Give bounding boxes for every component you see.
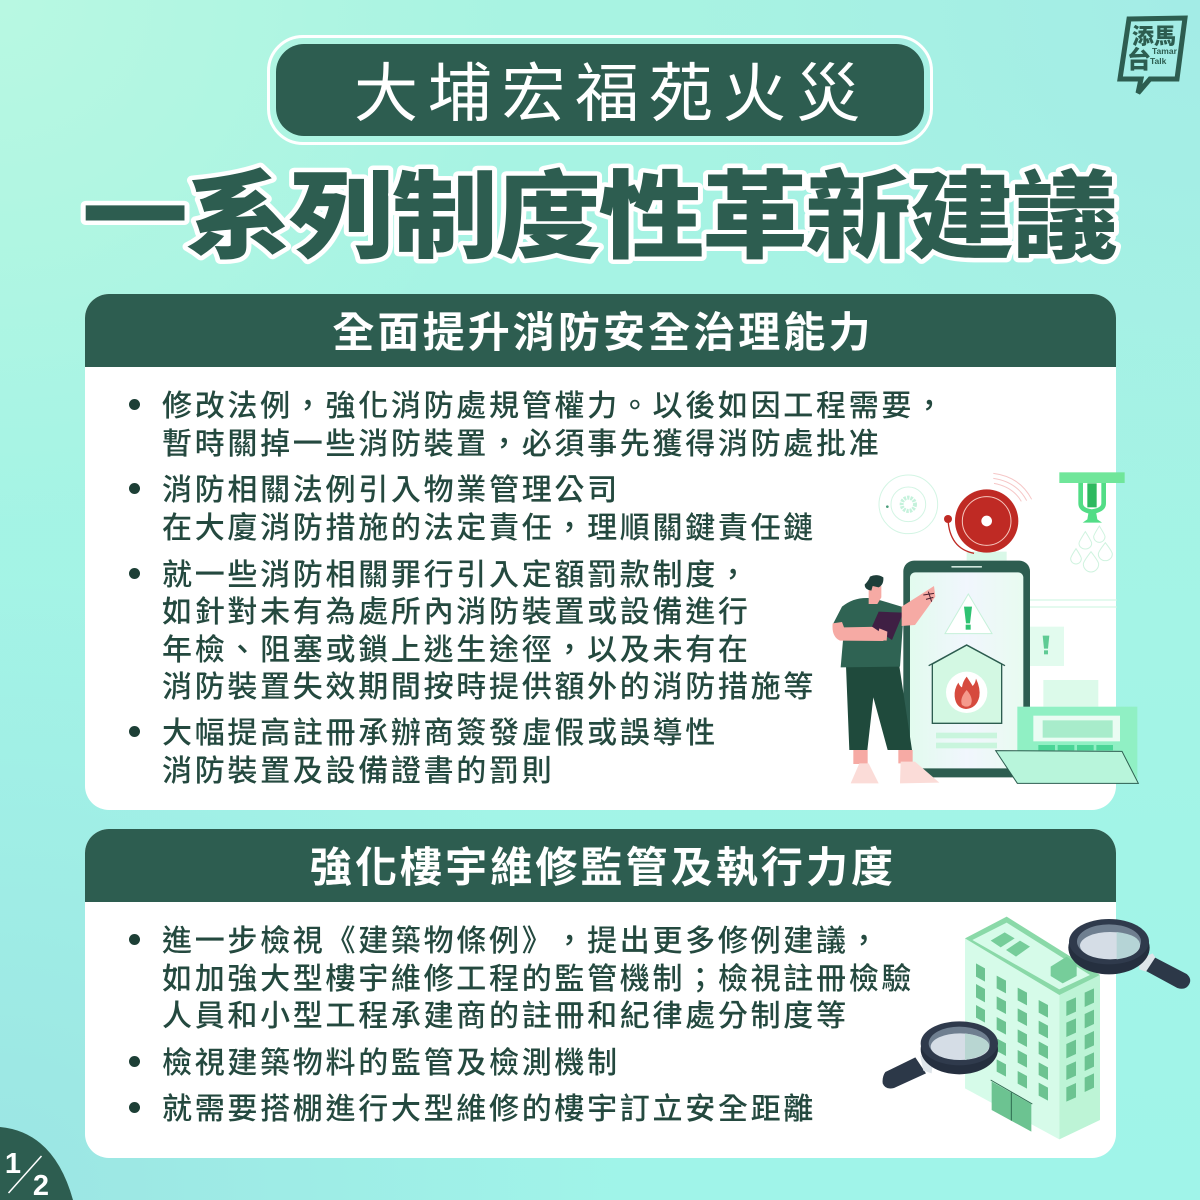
text block: building maintenance recommendations: 如加強大型樓宇維修工程的監管機制；檢視註冊檢驗 (162, 963, 914, 996)
text block: fire safety recommendations: 修改法例，強化消防處規管權力。以後如因工程需要， (162, 390, 947, 423)
icon: wall panel with warning (1030, 600, 1117, 707)
icon: smoke detector (879, 475, 938, 534)
text block: fire safety recommendations: 暫時關掉一些消防裝置，必須事先獲得消防處批准 (162, 428, 881, 461)
heading: fire safety governance (85, 294, 1116, 367)
icon: sprinkler and water drops (1059, 472, 1125, 572)
text block: fire safety recommendations: 消防相關法例引入物業管理公司 (162, 474, 620, 507)
heading: building maintenance: 強化樓宇維修監管及執行力度 (310, 844, 896, 891)
icon: upper magnifying glass (1068, 919, 1190, 989)
text block: fire safety recommendations: 在大廈消防措施的法定責任，理順關鍵責任鏈 (162, 512, 816, 545)
text block: fire safety recommendations: 消防裝置失效期間按時提供額外的消防措施等 (162, 671, 816, 704)
heading: fire safety governance: 全面提升消防安全治理能力 (332, 309, 874, 356)
text block: building maintenance recommendations: 就需要搭棚進行大型維修的樓宇訂立安全距離 (162, 1093, 816, 1126)
text block: building maintenance recommendations: 檢視建築物料的監管及檢測機制 (162, 1047, 620, 1080)
title badge (267, 35, 933, 145)
panel: fire safety governance background (85, 294, 1116, 810)
logo: Tamar Talk speech bubble: 添馬 (1132, 19, 1176, 51)
icon: control console and keyboard (996, 707, 1138, 783)
panel: building maintenance background (85, 829, 1116, 1158)
text block: fire safety recommendations: 年檢、阻塞或鎖上逃生途徑，以及未有在 (162, 634, 751, 667)
page indicator: 1/2: 1 (5, 1148, 21, 1180)
logo: Tamar Talk speech bubble: Talk (1150, 56, 1167, 66)
logo: Tamar Talk speech bubble: 台 (1127, 40, 1151, 75)
icon: green office building (965, 917, 1100, 1139)
icon: person holding tablet (832, 575, 939, 783)
text block: building maintenance recommendations: 人員和小型工程承建商的註冊和紀律處分制度等 (162, 1000, 849, 1033)
main title: 一系列制度性革新建議 (82, 140, 1118, 278)
text block: fire safety recommendations: 如針對未有為處所內消防裝置或設備進行 (162, 596, 751, 629)
icon: lower magnifying glass (883, 1021, 998, 1088)
icon: smartphone with alert screen (903, 561, 1030, 777)
text block: fire safety recommendations: 大幅提高註冊承辦商簽發虛假或誤導性 (162, 717, 718, 750)
page indicator: 1/2 (0, 1127, 73, 1200)
logo: Tamar Talk speech bubble: Tamar (1152, 46, 1178, 56)
text block: fire safety recommendations: 消防裝置及設備證書的罰則 (162, 755, 554, 788)
title badge: 大埔宏福苑火災 (354, 58, 870, 130)
icon: fire alarm bell (944, 473, 1032, 560)
text block: fire safety recommendations: 就一些消防相關罪行引入定額罰款制度， (162, 559, 751, 592)
text block: building maintenance recommendations: 進一步檢視《建築物條例》，提出更多修例建議， (162, 925, 881, 958)
heading: building maintenance (85, 829, 1116, 902)
